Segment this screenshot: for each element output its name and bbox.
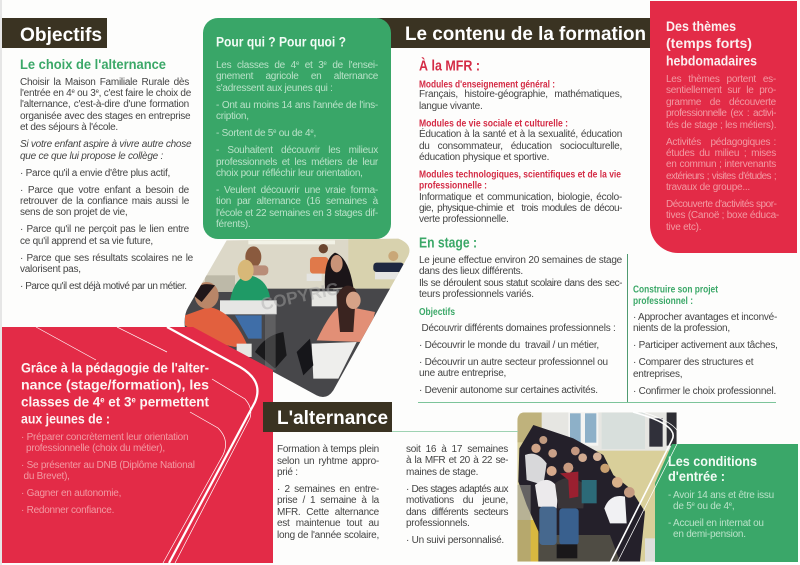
text: pour qui bbox=[216, 60, 378, 230]
text: modules bbox=[419, 89, 622, 225]
lines on green conditions panel bbox=[655, 444, 798, 562]
text: modules: verte professionnelle. bbox=[419, 214, 509, 225]
text: le choix de l'alternance: · Parce que votre enfant a besoin de bbox=[20, 184, 189, 196]
text: des thèmes: tive etc). bbox=[666, 222, 701, 233]
text: pour qui: - Veulent découvrir une vraie forma- bbox=[216, 185, 378, 196]
text: le choix de l'alternance: Choisir la Maison Familiale Rurale dès bbox=[20, 77, 189, 88]
text: des thèmes: gramme de découverte bbox=[666, 97, 776, 108]
text: des thèmes: en commun ; intervenants bbox=[666, 159, 776, 170]
banner: Objectifs bbox=[2, 18, 107, 48]
text: construire son projet: · Confirmer le choix professionnel. bbox=[633, 386, 776, 397]
text: les conditions d'entrée: - Avoir 14 ans et être issu bbox=[668, 490, 774, 501]
heading: construire son projet: professionnel : bbox=[633, 296, 693, 307]
heading: grâce à la pédagogie: e bbox=[100, 396, 105, 405]
text: des thèmes: travaux de groupe... bbox=[666, 182, 750, 193]
text: le choix de l'alternance: retrouver de la confiance mais aussi le bbox=[20, 196, 189, 207]
text: des thèmes: sentiellement sur le pro- bbox=[666, 85, 776, 96]
heading: grâce à la pédagogie: e bbox=[131, 396, 136, 405]
heading: objectifs stage: Objectifs bbox=[419, 307, 455, 318]
text: alternance colonne 2: dans différents secteurs bbox=[406, 507, 508, 518]
text: le choix de l'alternance: · Parce que ses résultats scolaires ne le bbox=[20, 253, 193, 264]
text: alternance colonne 1: selon un ryhtme appro- bbox=[277, 456, 379, 467]
text: le choix de l'alternance: valorisent pas, bbox=[20, 264, 81, 275]
text: pour qui: professionnels et les métiers de leur bbox=[216, 157, 378, 168]
text: grâce à la pédagogie: professionnelle (choix du métier), bbox=[26, 443, 165, 454]
text: alternance colonne 2: maines de stage. bbox=[406, 467, 478, 478]
text: en stage: teurs professionnels variés. bbox=[419, 289, 534, 300]
banner: le contenu de la formation bbox=[377, 18, 650, 48]
text: pour qui: - Souhaitent découvrir les milieux bbox=[216, 145, 378, 156]
text: le choix de l'alternance: que ce que lui propose le collège : bbox=[20, 151, 163, 162]
text: modules: éducation physique et sportive. bbox=[419, 152, 549, 163]
text: le choix de l'alternance: l'alternance, c'est-à-dire d'une formation bbox=[20, 99, 189, 110]
text: construire son projet: · Participer activement aux tâches, bbox=[633, 340, 778, 351]
text: pour qui: gnement agricole en alternance bbox=[216, 71, 378, 82]
text: des thèmes: tives (Canoë ; boxe éduca- bbox=[666, 210, 779, 221]
text: objectifs stage bbox=[419, 323, 616, 396]
text: en stage: Le jeune effectue environ 20 semaines de stage bbox=[419, 255, 622, 266]
text: le choix de l'alternance: et des séjours à l'école. bbox=[20, 122, 118, 133]
text: grâce à la pédagogie: · Se présenter au DNB (Diplôme National bbox=[21, 460, 195, 471]
text: alternance colonne 1: prise / 1 semaine à la bbox=[277, 495, 379, 506]
text: alternance colonne 2: · Un suivi personnalisé. bbox=[406, 535, 504, 546]
heading: modules vie sociale: Modules de vie sociale et culturelle : bbox=[419, 119, 568, 130]
heading: des thèmes: Des thèmes bbox=[666, 18, 736, 34]
classroom photo: COPYRIG bbox=[259, 278, 341, 314]
banner: l'alternance bbox=[263, 402, 392, 432]
text: construire son projet: entreprises, bbox=[633, 369, 682, 380]
heading: grâce à la pédagogie: aux jeunes de : bbox=[21, 410, 110, 426]
heading: les conditions d'entrée bbox=[668, 453, 757, 484]
panel: pour qui pour quoi bbox=[203, 18, 391, 239]
text: les conditions d'entrée: en demi-pension. bbox=[673, 529, 746, 540]
text: grâce à la pédagogie: du Brevet), bbox=[24, 471, 70, 482]
heading: Objectifs: Objectifs bbox=[20, 25, 102, 46]
text: le choix de l'alternance: · Parce qu'il est déjà motivé par un métier. bbox=[20, 281, 187, 292]
text: des thèmes: extérieurs ; visites d'études ; bbox=[666, 171, 776, 182]
text: le choix de l'alternance: · Parce qu'il ne perçoit pas le lien entre bbox=[20, 224, 189, 235]
text: grâce à la pédagogie: · Préparer concrètement leur orientation bbox=[21, 432, 188, 443]
text: des thèmes: études du milieu ; mises bbox=[666, 148, 776, 159]
heading: Le choix de l'alternance: Le choix de l'alternance bbox=[20, 56, 166, 72]
text: en stage: dans des lieux différents. bbox=[419, 266, 523, 277]
text: en stage: Ils se déroulent sous statut scolaire dans des sec- bbox=[419, 278, 622, 289]
text: alternance colonne 2: professionnels. bbox=[406, 518, 470, 529]
text: les conditions d'entrée: - Accueil en internat ou bbox=[668, 518, 764, 529]
text: des thèmes: professionnelle (ex : activi- bbox=[666, 108, 776, 119]
text: objectifs stage: Découvrir différents domaines professionnels : bbox=[422, 323, 616, 334]
text: objectifs stage: · Découvrir le monde du travail / un métier, bbox=[419, 340, 599, 351]
heading: modules enseignement général: Modules d'enseignement général : bbox=[419, 80, 555, 90]
text: pour qui: Les classes de 4e et 3e de l'ensei- bbox=[216, 60, 378, 71]
heading: des thèmes: (temps forts) bbox=[666, 35, 752, 51]
text: modules: du consommateur, éducation socioculturelle, bbox=[419, 141, 622, 152]
text: modules: Informatique et communication, biologie, écolo- bbox=[419, 192, 622, 203]
text: grâce à la pédagogie: · Redonner confiance. bbox=[21, 505, 114, 516]
text: construire son projet bbox=[633, 312, 778, 397]
text: objectifs stage: · Devenir autonome sur certaines activités. bbox=[419, 385, 598, 396]
text: grâce à la pédagogie: · Gagner en autonomie, bbox=[21, 488, 121, 499]
heading: des thèmes: hebdomadaires bbox=[666, 53, 757, 69]
heading: À la MFR: À la MFR : bbox=[419, 58, 480, 75]
heading: grâce à la pédagogie: permettent bbox=[136, 394, 209, 410]
heading: Pour qui: Pour qui ? Pour quoi ? bbox=[216, 35, 346, 50]
text: des thèmes: tés de stage ; les métiers). bbox=[666, 120, 776, 131]
text: alternance colonne 2: motivations du jeune, bbox=[406, 495, 508, 506]
text: pour qui: cription, bbox=[216, 111, 249, 122]
text: les conditions d'entrée: de 5e ou de 4e, bbox=[673, 501, 734, 512]
text: alternance colonne 1: est maintenue tout au bbox=[277, 518, 379, 529]
heading: grâce à la pédagogie: classes de 4 bbox=[21, 394, 104, 410]
text: alternance colonne 1: long de l'année scolaire, bbox=[277, 530, 379, 541]
text: modules: langue vivante. bbox=[419, 101, 483, 112]
text: pour qui: tion par alternance (16 semaines à bbox=[216, 196, 378, 207]
text: le choix de l'alternance: l'entrée en 4e ou 3e, c'est faire le choix de bbox=[20, 88, 191, 99]
panel: des thèmes bbox=[650, 1, 797, 253]
text: le choix de l'alternance: · Parce qu'il a envie d'être plus actif, bbox=[20, 168, 170, 179]
text: alternance colonne 1: · 2 semaines en entre- bbox=[277, 484, 379, 495]
text: pour qui: choix pour réfléchir leur orientation, bbox=[216, 168, 363, 179]
heading: L'alternance: L'alternance bbox=[277, 408, 388, 429]
heading: construire son projet bbox=[633, 285, 719, 307]
text: pour qui: - Ont au moins 14 ans l'année de l'ins- bbox=[216, 100, 378, 111]
text: alternance colonne 2: soit 16 à 17 semaines bbox=[406, 444, 508, 455]
text: des thèmes bbox=[666, 74, 779, 233]
text: grâce à la pédagogie bbox=[21, 432, 195, 516]
heading: construire son projet: Construire son projet bbox=[633, 285, 719, 296]
scan edge bbox=[0, 0, 2, 565]
text: le choix de l'alternance: organisée avec des stages en entreprise bbox=[20, 111, 190, 122]
text: objectifs stage: · Découvrir un autre secteur professionnel ou bbox=[419, 357, 608, 368]
classroom photo bbox=[184, 238, 677, 562]
text: pour qui: - Sortent de 5e ou de 4e, bbox=[216, 128, 316, 139]
text: pour qui: l'école et 22 semaines en 3 stages dif- bbox=[216, 208, 378, 219]
text: les conditions d'entrée bbox=[668, 490, 774, 540]
text: le choix de l'alternance: ce qu'il apprend et sa vie future, bbox=[20, 236, 153, 247]
heading: Le contenu de la formation: Le contenu de la formation bbox=[405, 23, 646, 45]
text: alternance colonne 1: Formation à temps plein bbox=[277, 444, 379, 455]
text: des thèmes: Les thèmes portent es- bbox=[666, 74, 776, 85]
heading: modules technologiques suite: professionnelle : bbox=[419, 180, 487, 191]
text: alternance colonne 1: MFR. Cette alternance bbox=[277, 507, 379, 518]
heading: En stage: En stage : bbox=[419, 234, 477, 251]
heading: modules technologiques: Modules technologiques, scientifiques et de la vie bbox=[419, 169, 621, 180]
text: des thèmes: Activités pédagogiques : bbox=[666, 137, 776, 148]
text: objectifs stage: une autre entreprise, bbox=[419, 368, 506, 379]
group photo bbox=[517, 412, 677, 562]
text: alternance colonne 2: · Des stages adaptés aux bbox=[406, 484, 508, 495]
text: pour qui: férents). bbox=[216, 219, 250, 230]
text: modules: gie, physique-chimie et trois modules de décou- bbox=[419, 203, 622, 214]
heading: les conditions d'entrée: d'entrée : bbox=[668, 468, 725, 484]
heading: grâce à la pédagogie bbox=[21, 359, 209, 426]
heading: grâce à la pédagogie: Grâce à la pédagogie de l'alter- bbox=[21, 359, 209, 375]
text: alternance colonne 1: prié : bbox=[277, 467, 298, 478]
text: construire son projet: nients de la profession, bbox=[633, 323, 730, 334]
heading: des thèmes bbox=[666, 18, 757, 69]
text: alternance colonne 2: à la MFR et 20 à 22 se- bbox=[406, 455, 508, 466]
text: construire son projet: · Comparer des structures et bbox=[633, 357, 753, 368]
text: le choix de l'alternance bbox=[20, 77, 193, 292]
text: construire son projet: · Approcher avantages et inconvé- bbox=[633, 312, 777, 323]
text: pour qui: s'adressent aux jeunes qui : bbox=[216, 83, 333, 94]
text: en stage bbox=[419, 255, 622, 300]
text: des thèmes: Découverte d'activités spor- bbox=[666, 199, 776, 210]
text: le choix de l'alternance: sens de son projet de vie, bbox=[20, 207, 127, 218]
text: le choix de l'alternance: Si votre enfant aspire à vivre autre chose bbox=[20, 139, 191, 150]
text: alternance colonne 1 bbox=[277, 444, 380, 541]
text: modules: Français, histoire-géographie, mathématiques, bbox=[419, 89, 622, 100]
text: modules: Éducation à la santé et à la sexualité, éducation bbox=[419, 129, 622, 140]
heading: grâce à la pédagogie: nance (stage/formation), les bbox=[21, 376, 209, 392]
heading: les conditions d'entrée: Les conditions bbox=[668, 453, 757, 469]
heading: grâce à la pédagogie: et 3 bbox=[105, 394, 132, 410]
text: alternance colonne 2 bbox=[406, 444, 508, 546]
